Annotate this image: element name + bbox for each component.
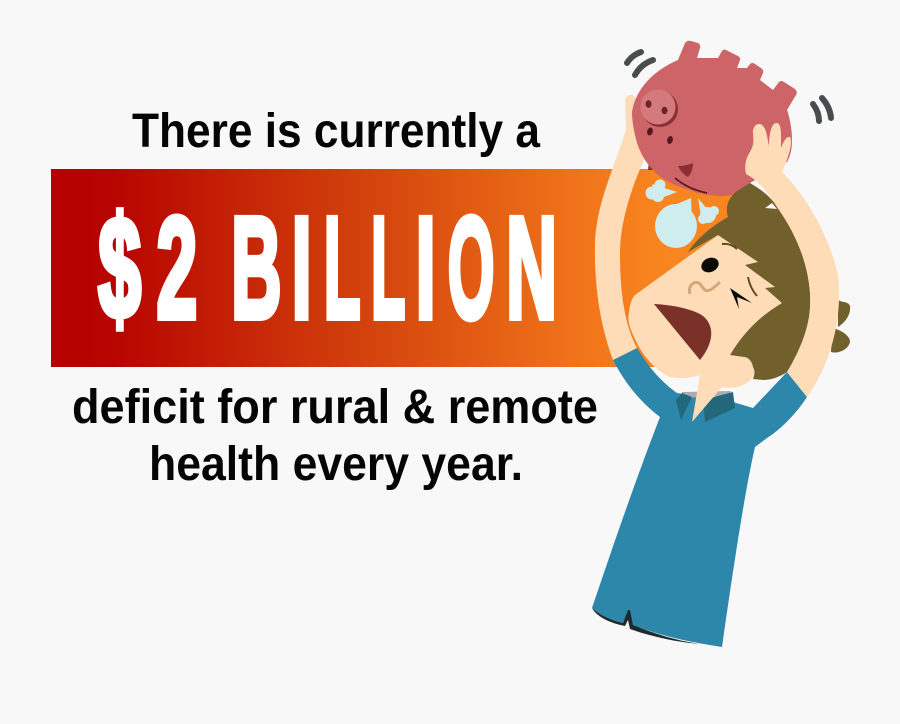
icon: nose <box>689 282 720 294</box>
icon: hair highlight sliver <box>765 203 777 209</box>
banner figure: $2 BILLION: I <box>416 188 436 348</box>
banner figure: $2 BILLION: L <box>371 188 405 348</box>
infographic canvas: N <box>506 188 557 348</box>
icon: pig eyes <box>646 127 674 145</box>
icon: open mouth <box>654 304 711 360</box>
banner figure: $2 BILLION: $ <box>98 188 141 348</box>
icon: pig body and legs <box>632 41 797 196</box>
banner figure: $2 BILLION: 2 <box>156 188 197 348</box>
icon: pig mouth <box>678 163 693 177</box>
icon: pig snout <box>640 90 678 127</box>
icon: left arm <box>595 95 645 360</box>
banner figure: $2 BILLION: L <box>324 188 360 348</box>
icon: winking eye <box>730 288 752 309</box>
banner figure: $2 BILLION: B <box>231 188 282 348</box>
icon: shirt hem shadow <box>592 608 700 644</box>
banner figure: $2 BILLION: O <box>448 188 494 348</box>
icon: right arm and hand <box>745 123 839 397</box>
icon: pig far ear <box>648 161 654 170</box>
banner figure: $2 BILLION: I <box>292 188 312 348</box>
icon: left eye <box>699 255 721 275</box>
icon: shake lines <box>627 52 831 121</box>
caption line 1: deficit for rural & remote <box>72 381 598 434</box>
icon: shirt collar underlay <box>682 391 731 398</box>
icon: steam puffs <box>646 180 719 248</box>
icon: face <box>628 235 800 422</box>
illustration: man shaking piggy bank <box>592 41 850 647</box>
icon: back hair bumps <box>831 300 850 353</box>
icon: hair <box>688 183 810 380</box>
icon: piggy bank <box>632 41 797 196</box>
heading line: intro text: There is currently a <box>132 105 540 158</box>
icon: pig smile <box>675 178 707 193</box>
icon: shirt <box>592 348 807 647</box>
icon: brows <box>722 244 757 296</box>
caption line 2: health every year. <box>149 438 523 491</box>
icon: shirt collar <box>676 392 735 422</box>
banner: gradient background <box>51 169 737 367</box>
